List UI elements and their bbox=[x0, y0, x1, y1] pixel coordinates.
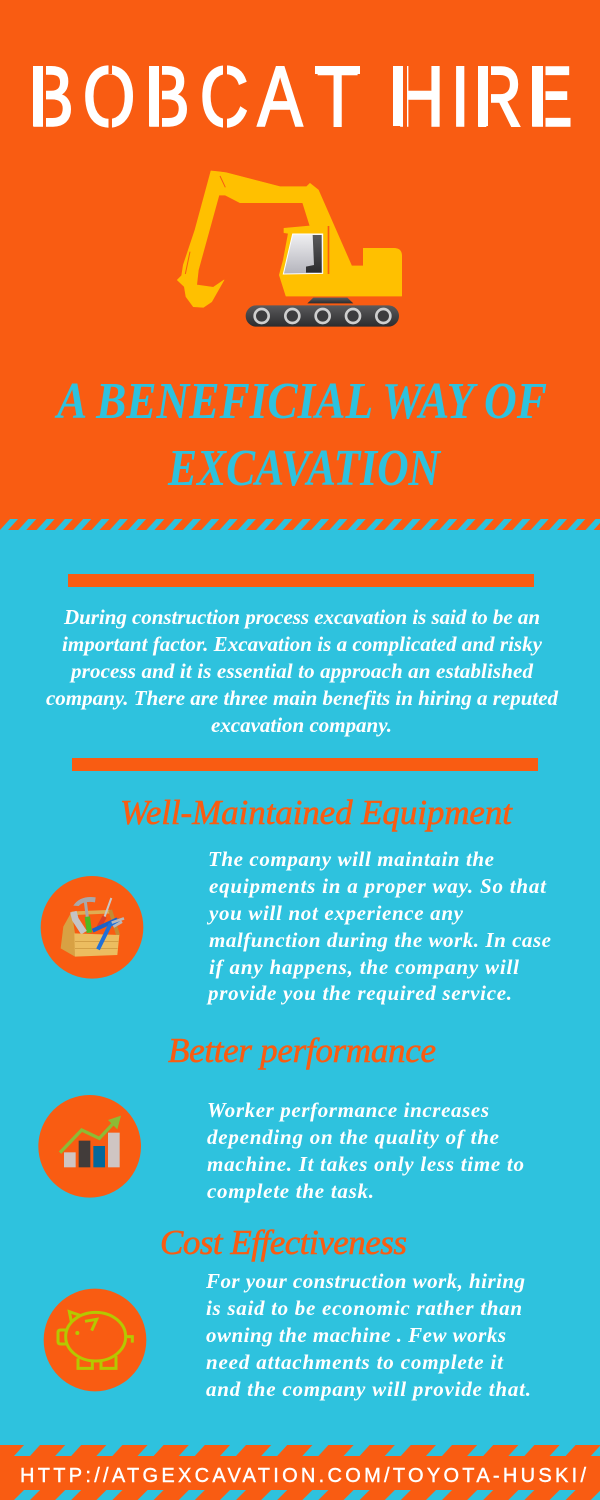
top orange bar bbox=[68, 574, 534, 587]
text: cost effectiveness: For your construction work, hiring bbox=[205, 1269, 525, 1293]
text: cost effectiveness bbox=[205, 1269, 531, 1401]
second orange bar bbox=[72, 758, 538, 771]
stripe band: footer top bbox=[0, 1445, 600, 1456]
text: cost effectiveness: and the company will provide that. bbox=[206, 1377, 531, 1401]
icon: piggy bank bbox=[44, 1289, 146, 1391]
text: well-maintained equipment: you will not experience any bbox=[206, 901, 464, 925]
text: well-maintained equipment: provide you the required service. bbox=[206, 981, 512, 1005]
footer panel bbox=[0, 1445, 600, 1500]
main title: BOBCAT HIRE bbox=[29, 50, 573, 144]
subtitle: EXCAVATION bbox=[167, 440, 442, 497]
text: better performance: Worker performance increases bbox=[207, 1098, 489, 1122]
intro text: important factor. Excavation is a complicated and risky bbox=[62, 632, 543, 656]
text: cost effectiveness: is said to be economic rather than bbox=[206, 1296, 522, 1320]
intro text: company. There are three main benefits in hiring a reputed bbox=[46, 686, 558, 710]
intro text: excavation company. bbox=[211, 713, 392, 737]
panel: body background bbox=[0, 530, 600, 1445]
text: cost effectiveness: need attachments to complete it bbox=[206, 1350, 504, 1374]
heading: cost effectiveness: Cost Effectiveness bbox=[160, 1223, 407, 1262]
icon: excavator bbox=[177, 171, 402, 327]
icon: toolbox bbox=[41, 876, 143, 979]
icon: growth chart bbox=[38, 1095, 141, 1198]
text: better performance: machine. It takes only less time to bbox=[207, 1152, 524, 1176]
heading: better performance: Better performance bbox=[168, 1031, 436, 1070]
text: better performance: depending on the quality of the bbox=[207, 1125, 499, 1149]
text: better performance: complete the task. bbox=[207, 1179, 374, 1203]
text: well-maintained equipment: equipments in a proper way. So that bbox=[209, 874, 547, 898]
text: cost effectiveness: owning the machine . Few works bbox=[206, 1323, 506, 1347]
text: better performance bbox=[207, 1098, 524, 1203]
subtitle bbox=[54, 373, 547, 497]
heading: well-maintained equipment: Well-Maintained Equipment bbox=[120, 793, 513, 832]
text: well-maintained equipment: The company will maintain the bbox=[208, 847, 494, 871]
footer url: HTTP://ATGEXCAVATION.COM/TOYOTA-HUSKI/ bbox=[20, 1465, 586, 1487]
intro text: During construction process excavation is said to be an bbox=[63, 605, 540, 629]
header panel bbox=[0, 0, 600, 530]
intro text: process and it is essential to approach an established bbox=[69, 659, 534, 683]
intro text bbox=[46, 605, 558, 737]
stripe band: header edge bbox=[0, 519, 600, 530]
stripe band: footer bottom bbox=[0, 1490, 600, 1500]
text: well-maintained equipment: if any happens, the company will bbox=[209, 955, 519, 979]
text: well-maintained equipment: malfunction during the work. In case bbox=[209, 928, 551, 952]
text: well-maintained equipment bbox=[206, 847, 551, 1005]
